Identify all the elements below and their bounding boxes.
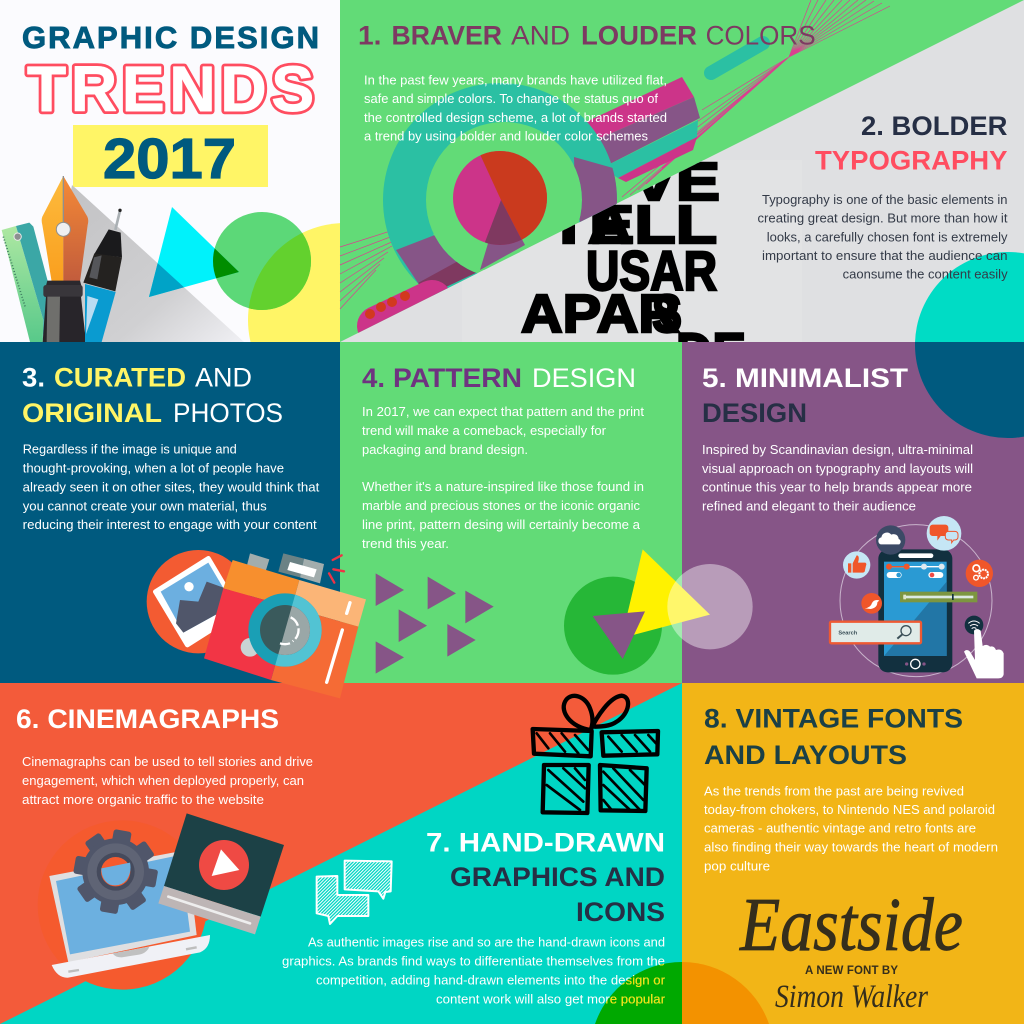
panel: cinemagraphs background xyxy=(0,683,682,1024)
body text 4: In 2017, we can expect that pattern and the print xyxy=(362,404,644,419)
body text 6: Cinemagraphs can be used to tell stories and drive xyxy=(22,754,313,769)
illustration: overlapping typography poster: S xyxy=(652,284,682,344)
panel: vintage fonts background xyxy=(682,683,1024,1024)
heading 3: ORIGINAL xyxy=(22,398,162,428)
body text 3: already seen it on other sites, they would think that xyxy=(23,479,320,494)
heading 2 xyxy=(815,111,1008,176)
illustration: paper texture area xyxy=(462,160,704,281)
search box: Search xyxy=(838,631,858,637)
heading 4: PATTERN xyxy=(393,363,522,393)
icon: bird xyxy=(861,593,882,614)
body text 4: line print, pattern desing will certainly become a xyxy=(362,517,641,532)
heading 8: 8. VINTAGE FONTS xyxy=(704,704,963,734)
heading 7: GRAPHICS AND xyxy=(450,862,665,892)
heading 5: DESIGN xyxy=(702,398,807,428)
body text 4: packaging and brand design. xyxy=(362,442,528,457)
panel: pattern design background xyxy=(340,342,682,683)
shape: pie circle xyxy=(453,151,547,245)
illustration: bold color shapes xyxy=(365,43,763,326)
heading 8: AND LAYOUTS xyxy=(704,740,907,770)
body text 3: Regardless if the image is unique and xyxy=(23,442,237,457)
panel: curated photos background xyxy=(0,342,340,683)
body text 8: also finding their way towards the heart of modern xyxy=(704,840,998,855)
icon: phone xyxy=(878,549,952,672)
vintage lettering sample xyxy=(739,883,963,1015)
heading 1: LOUDER xyxy=(581,20,697,50)
body text 7: tinted overlap on green circle: competition, adding hand-drawn elements into the design or xyxy=(316,972,666,987)
heading: graphic design: GRAPHIC DESIGN xyxy=(22,20,319,55)
icon: pointing hand xyxy=(964,629,1004,678)
body text 1: the controlled design scheme, a lot of brands started xyxy=(364,110,667,125)
title block xyxy=(22,20,319,191)
shape: magenta pill with dots xyxy=(365,291,432,326)
body text 7: As authentic images rise and so are the hand-drawn icons and xyxy=(308,935,665,950)
heading 5: 5. MINIMALIST xyxy=(702,363,909,393)
search box xyxy=(830,622,921,643)
body text 8 xyxy=(704,783,998,873)
heading 7: 7. HAND-DRAWN xyxy=(426,828,665,858)
body text 1: a trend by using bolder and louder color schemes xyxy=(364,128,648,144)
section 4: pattern design xyxy=(362,363,644,551)
illustration: overlapping typography poster: APAR xyxy=(521,284,680,344)
body text 7: competition, adding hand-drawn elements into the design or xyxy=(316,972,666,987)
icon: gears xyxy=(966,560,993,587)
heading 1 xyxy=(358,20,816,50)
section 2: bolder typography xyxy=(758,111,1008,282)
body text 7: tinted overlap on green circle: content work will also get more popular xyxy=(436,991,666,1006)
illustration: pen, ruler and marker xyxy=(2,176,122,342)
body text 2: caonsume the content easily xyxy=(843,267,1008,282)
year highlight box xyxy=(73,125,268,187)
icon: cloud xyxy=(876,525,905,555)
panel: braver colors background xyxy=(340,0,1024,342)
decoration: green circle segment xyxy=(595,962,682,1024)
shape: teal capsule xyxy=(711,43,763,73)
body text 7 xyxy=(282,935,666,1006)
body text 5: visual approach on typography and layouts will xyxy=(702,461,973,476)
body text 6: attract more organic traffic to the website xyxy=(22,792,264,807)
heading 3: CURATED xyxy=(54,362,186,392)
panel: minimalist design background xyxy=(682,342,1024,683)
body text 4: trend this year. xyxy=(362,536,449,551)
heading: trends outline: TRENDS xyxy=(27,53,314,125)
icon: camera xyxy=(204,553,366,698)
heading: trends outline: TRENDS xyxy=(27,53,314,125)
body text 2: looks, a carefully chosen font is extremely xyxy=(767,229,1008,244)
body text 8: cameras - authentic vintage and retro fonts are xyxy=(704,821,976,836)
heading 1: AND xyxy=(511,20,570,50)
illustration: smartphone with app icons xyxy=(830,516,1004,678)
body text 7: tinted overlap on green circle xyxy=(606,964,665,1006)
illustration: overlapping typography poster xyxy=(520,162,744,342)
body text 5 xyxy=(702,442,973,514)
body text 1: safe and simple colors. To change the status quo of xyxy=(364,91,658,106)
icon: laptop xyxy=(49,850,210,978)
body text 2: creating great design. But more than how it xyxy=(758,211,1008,226)
body text 3: you cannot create your own material, thus xyxy=(23,498,267,513)
body text 1 xyxy=(364,72,667,144)
decoration: orange circle segment xyxy=(682,962,769,1024)
heading 8 xyxy=(704,704,963,770)
icon: speech bubbles xyxy=(927,516,961,551)
body text 1: In the past few years, many brands have utilized flat, xyxy=(364,72,667,88)
vintage lettering sample: Simon Walker xyxy=(775,979,928,1015)
section 7: hand-drawn graphics and icons xyxy=(282,828,666,1006)
icon: polaroid xyxy=(155,558,240,645)
illustration: geometric shapes xyxy=(63,185,340,342)
heading 6: 6. CINEMAGRAPHS xyxy=(16,704,279,734)
illustration: photo and camera xyxy=(147,550,366,698)
heading 3 xyxy=(22,362,283,428)
body text 3: reducing their interest to engage with your content xyxy=(23,517,317,532)
heading 7 xyxy=(426,828,665,927)
shape: teal ring xyxy=(383,83,617,296)
body text 7: graphics. As brands find ways to differentiate themselves from the xyxy=(282,953,665,968)
heading 7: ICONS xyxy=(576,897,665,927)
illustration: moire line art xyxy=(340,0,890,309)
heading 4 xyxy=(362,363,636,393)
heading 1: 1. xyxy=(358,20,382,50)
illustration: overlapping typography poster: LOVE xyxy=(540,152,720,212)
section 1: braver and louder colors xyxy=(358,20,816,144)
body text 8: As the trends from the past are being revived xyxy=(704,783,964,798)
body text 8: today-from chokers, to Nintendo NES and polaroid xyxy=(704,802,995,817)
body text 5: Inspired by Scandinavian design, ultra-minimal xyxy=(702,442,973,457)
icon: hand-drawn gift box xyxy=(533,696,658,813)
body text 2: important to ensure that the audience can xyxy=(762,248,1008,263)
body text 6 xyxy=(22,754,313,807)
body text 3 xyxy=(23,442,320,532)
section 6: cinemagraphs xyxy=(16,704,313,807)
body text 4: marble and precious stones or the iconic organic xyxy=(362,498,640,513)
body text 6: engagement, which when deployed properly, can xyxy=(22,773,304,788)
illustration: overlapping typography poster: DE xyxy=(676,321,746,384)
panel: title background xyxy=(0,0,340,342)
icon: gear xyxy=(73,829,158,914)
vintage lettering sample: Eastside xyxy=(739,883,963,967)
heading 3: AND xyxy=(195,362,252,392)
body text 5: continue this year to help brands appear more xyxy=(702,480,972,494)
section 5: minimalist design xyxy=(702,363,973,514)
body text 2: Typography is one of the basic elements in xyxy=(762,192,1008,207)
heading 1: COLORS xyxy=(706,20,816,50)
shape: striped magenta block xyxy=(575,77,700,182)
heading 4: DESIGN xyxy=(532,363,636,393)
illustration: overlapping typography poster: A xyxy=(588,195,632,255)
body text 4 xyxy=(362,404,644,551)
body text 4: trend will make a comeback, especially for xyxy=(362,423,607,438)
panel: hand-drawn background xyxy=(0,683,682,1024)
icon: ruler xyxy=(2,223,48,342)
icon: marker xyxy=(83,209,122,342)
illustration: laptop, gear and video card xyxy=(38,813,284,990)
icon: wifi xyxy=(965,616,983,634)
body text 7: tinted overlap on green circle: graphics. As brands find ways to differentiate themselves from the xyxy=(282,953,665,968)
icon: fountain pen xyxy=(42,176,88,342)
body text 8: pop culture xyxy=(704,858,770,873)
heading 2: 2. BOLDER xyxy=(861,111,1008,141)
section 8: vintage fonts and layouts xyxy=(704,704,998,1015)
illustration: overlapping typography poster: TELL xyxy=(548,195,717,255)
icon: thumbs up xyxy=(843,551,870,579)
body text 4: Whether it's a nature-inspired like those found in xyxy=(362,479,644,494)
decoration: teal and navy circle xyxy=(915,252,1024,438)
section 3: curated and original photos xyxy=(22,362,320,532)
icon: video card xyxy=(158,813,284,934)
illustration: overlapping typography poster: USAR xyxy=(586,239,717,302)
body text 3: thought-provoking, when a lot of people have xyxy=(23,461,284,476)
heading 5 xyxy=(702,363,909,428)
panel: bolder typography background xyxy=(340,0,1024,342)
icon: hand-drawn speech bubbles xyxy=(317,861,392,924)
body text 2 xyxy=(758,192,1008,282)
vintage lettering sample: A NEW FONT BY xyxy=(805,965,898,977)
heading 2: TYPOGRAPHY xyxy=(815,146,1008,176)
body text 7: content work will also get more popular xyxy=(436,991,666,1006)
body text 5: refined and elegant to their audience xyxy=(702,498,916,514)
illustration: triangle pattern and shapes xyxy=(376,549,753,675)
heading: 2017: 2017 xyxy=(103,127,236,191)
slider bar xyxy=(900,592,977,602)
heading 3: PHOTOS xyxy=(173,398,283,428)
heading 4: 4. xyxy=(362,363,385,393)
heading 3: 3. xyxy=(22,362,45,392)
heading 1: BRAVER xyxy=(392,20,502,50)
